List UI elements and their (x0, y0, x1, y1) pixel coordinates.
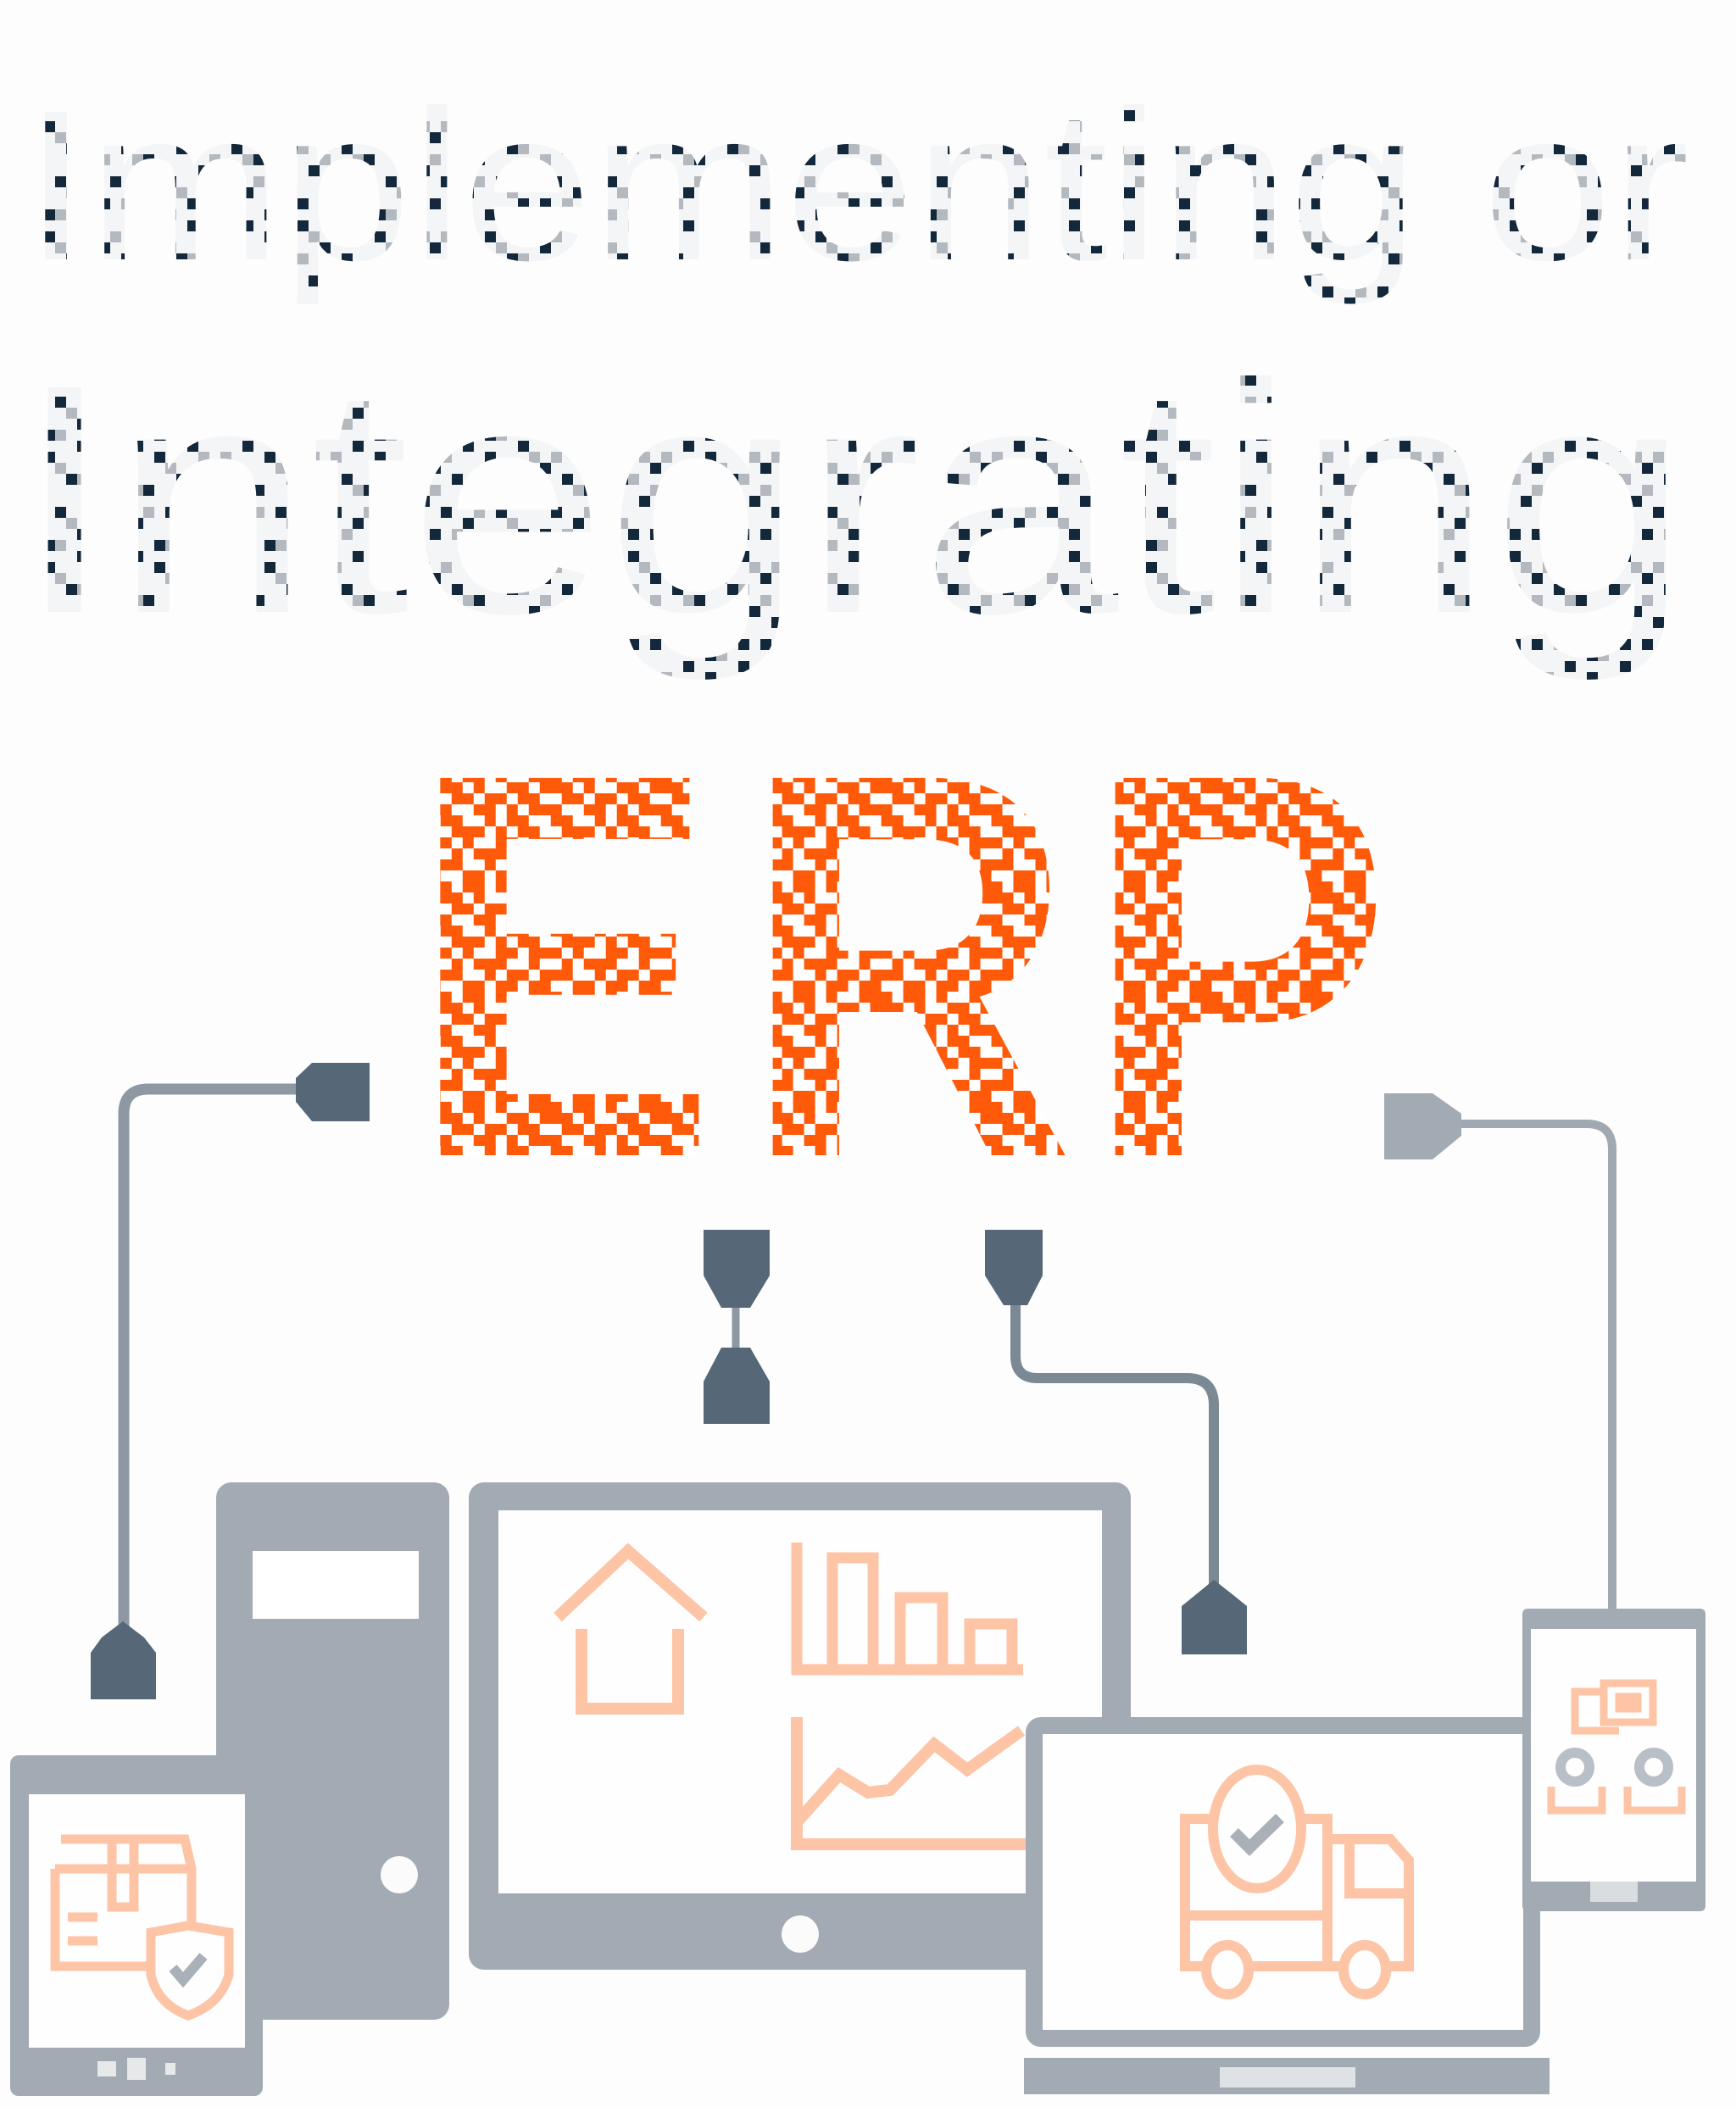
tower drive window (253, 1551, 419, 1619)
plug: above tablet (91, 1621, 156, 1699)
plug: centre lower (704, 1348, 770, 1424)
plug: right (1384, 1093, 1461, 1159)
icon: truck with shield (1185, 1770, 1409, 1994)
bar chart (797, 1543, 1023, 1670)
tablet screen (29, 1794, 245, 2048)
plug: top left (296, 1063, 370, 1121)
monitor screen (498, 1510, 1102, 1893)
laptop base (1024, 2058, 1550, 2094)
title: line one: Implementing or (24, 65, 1689, 305)
device: laptop (1024, 1726, 1550, 2094)
title: ERP: ERP (409, 659, 1392, 1272)
cable: right plug to phone (1384, 1093, 1612, 1610)
plug: centre right upper (985, 1230, 1043, 1305)
monitor button (782, 1915, 819, 1953)
icon: package with shield (55, 1839, 229, 2015)
tablet home buttons (97, 2058, 175, 2080)
plug: above laptop (1182, 1580, 1247, 1654)
icon: network of people (1551, 1683, 1682, 1810)
plug: centre upper (704, 1230, 770, 1308)
device: monitor (469, 1482, 1131, 1970)
device: phone (1522, 1609, 1705, 1911)
line chart (797, 1717, 1026, 1844)
phone screen (1531, 1629, 1696, 1882)
title: line two: Integrating (15, 316, 1689, 683)
cable: centre pair of plugs (704, 1230, 770, 1424)
tower power button (381, 1856, 418, 1893)
cable: centre right plug to monitor (985, 1230, 1247, 1654)
icon: house (558, 1551, 704, 1709)
phone button (1590, 1882, 1638, 1902)
device: desktop tower (216, 1482, 449, 2020)
laptop notch (1220, 2067, 1355, 2088)
cable: top left plug to tablet (91, 1063, 370, 1699)
device: tablet (10, 1755, 263, 2096)
